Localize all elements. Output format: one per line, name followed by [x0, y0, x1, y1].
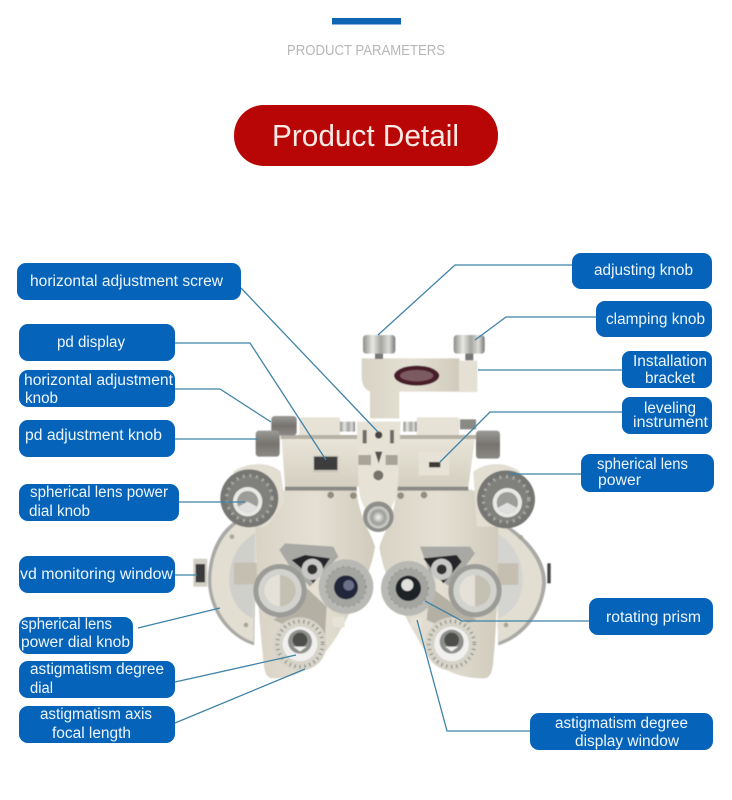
label: pd adjustment knob — [19, 420, 175, 457]
label: vd monitoring window: vd monitoring window — [20, 566, 174, 583]
label: astigmatism axis focal length: focal length — [52, 725, 131, 742]
label: adjusting knob: adjusting knob — [594, 262, 693, 279]
pd adjustment knobs — [256, 431, 500, 459]
left side drum — [208, 521, 259, 645]
label: horizontal adjustment knob: horizontal adjustment — [24, 372, 174, 389]
title pill — [234, 105, 498, 166]
top accent bar — [332, 18, 401, 24]
label: installation bracket: Installation — [633, 353, 707, 370]
clamping knob — [454, 335, 485, 360]
leader lines — [138, 265, 622, 731]
label: spherical lens power dial knob: spherical lens power — [30, 484, 168, 501]
label: horizontal adjustment knob: knob — [25, 390, 58, 407]
adjusting knob — [363, 335, 395, 359]
label: astigmatism degree display window: display window — [575, 733, 680, 750]
label: rotating prism — [589, 598, 713, 635]
label: horizontal adjustment knob — [19, 370, 175, 407]
label: spherical lens power dial knob lower: power dial knob — [21, 634, 130, 651]
title pill: Product Detail — [272, 118, 459, 153]
right lens assembly — [381, 547, 502, 630]
label: astigmatism degree dial — [19, 661, 175, 698]
label: astigmatism degree display window — [530, 713, 713, 750]
label: clamping knob: clamping knob — [606, 311, 705, 328]
right astigmatism dial — [425, 617, 478, 671]
label: astigmatism degree display window: astigmatism degree — [555, 715, 688, 732]
left lens assembly — [253, 543, 373, 637]
label: pd display: pd display — [57, 334, 125, 351]
vd window — [193, 559, 551, 587]
label: spherical lens power: power — [598, 472, 641, 489]
subtitle: PRODUCT PARAMETERS — [287, 43, 445, 59]
upper housing right — [397, 438, 475, 487]
label: pd display — [19, 324, 175, 361]
label: rotating prism: rotating prism — [606, 609, 701, 626]
phoropter device illustration — [193, 335, 551, 678]
label: spherical lens power: spherical lens — [597, 456, 688, 473]
label: spherical lens power dial knob lower: spherical lens — [21, 616, 112, 633]
lower right body — [379, 488, 498, 678]
gap shadow — [375, 533, 380, 547]
left spherical dial — [220, 464, 285, 527]
center column — [357, 422, 401, 532]
label: astigmatism axis focal length — [19, 706, 175, 743]
label: leveling instrument: leveling — [644, 400, 696, 417]
label: leveling instrument: instrument — [633, 414, 709, 431]
mounting post and bracket — [362, 358, 477, 418]
right side drum — [495, 521, 546, 645]
label: astigmatism degree dial: dial — [30, 680, 53, 697]
label: astigmatism degree dial: astigmatism degree — [30, 661, 164, 678]
label: astigmatism axis focal length: astigmatism axis — [40, 706, 152, 723]
top cream bars — [281, 417, 477, 439]
upper housing left — [282, 438, 360, 487]
label: clamping knob — [596, 301, 712, 337]
horizontal rail — [285, 487, 468, 491]
label: spherical lens power — [581, 454, 714, 492]
label: horizontal adjustment screw: horizontal adjustment screw — [30, 273, 224, 290]
label: pd adjustment knob: pd adjustment knob — [25, 427, 162, 444]
label: vd monitoring window — [19, 556, 175, 593]
pd display window — [313, 456, 338, 472]
label: spherical lens power dial knob lower — [19, 616, 133, 654]
label: adjusting knob — [572, 253, 712, 289]
right spherical dial — [473, 464, 535, 528]
level window — [419, 452, 449, 475]
label: installation bracket: bracket — [645, 370, 696, 387]
lower left body — [256, 488, 375, 678]
left astigmatism dial — [273, 617, 327, 671]
horizontal adjustment knob — [271, 416, 297, 435]
label: installation bracket — [622, 351, 712, 388]
label: horizontal adjustment screw — [17, 263, 241, 300]
label: spherical lens power dial knob: dial knob — [29, 503, 90, 520]
label: spherical lens power dial knob — [19, 484, 179, 521]
label: leveling instrument — [622, 397, 712, 434]
